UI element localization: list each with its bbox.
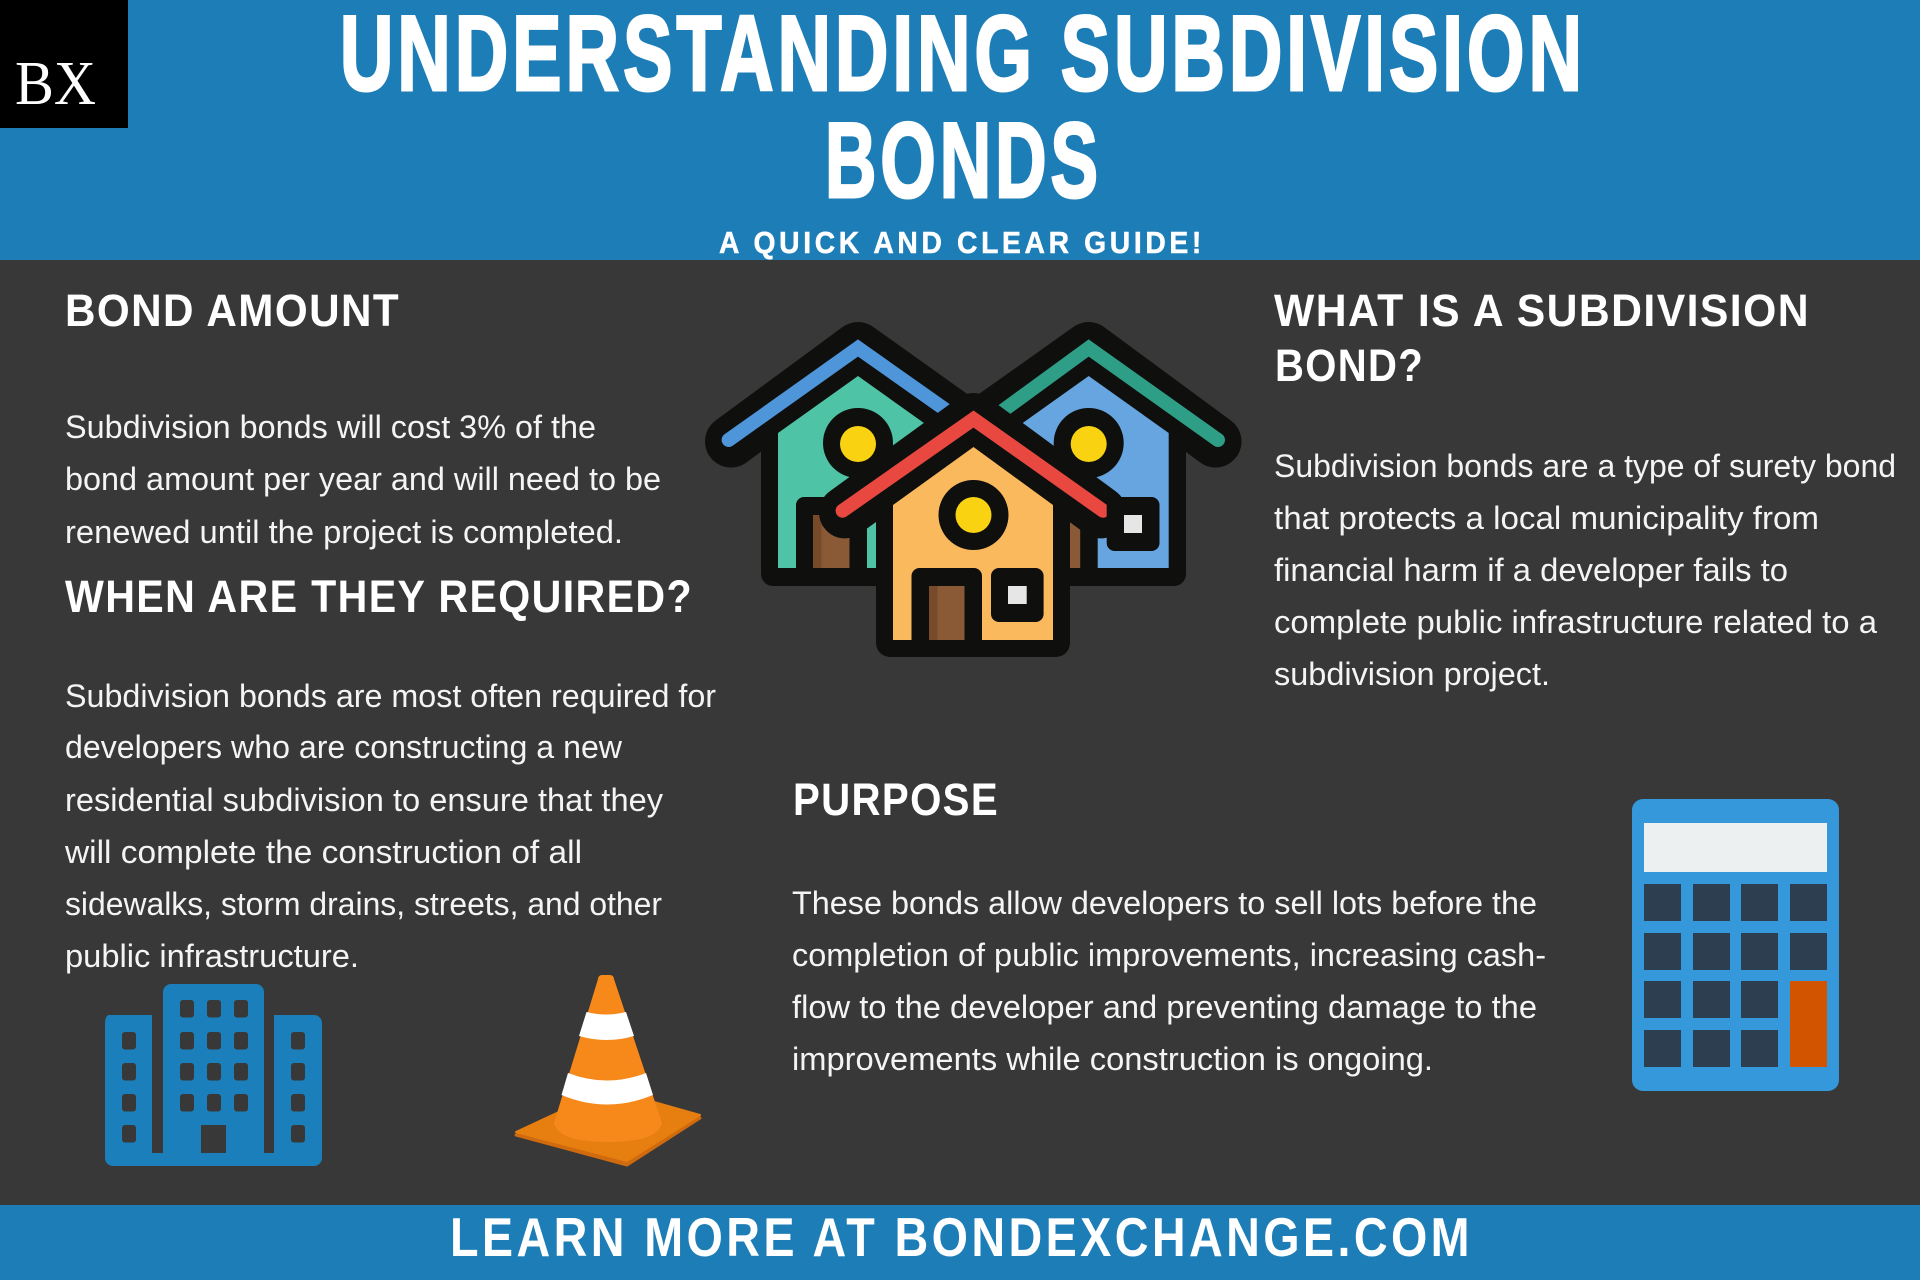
text: when required body: sidewalks, storm drains, streets, and other [65, 886, 662, 922]
text: purpose body: completion of public improvements, increasing cash- [792, 937, 1546, 973]
panel: purpose [792, 774, 1546, 1077]
heading: what is a subdivision bond: BOND? [1275, 340, 1424, 391]
text: when required body: residential subdivision to ensure that they [65, 782, 663, 818]
text: when required body: public infrastructure. [65, 938, 359, 974]
heading: purpose: PURPOSE [793, 774, 999, 825]
heading: what is a subdivision bond [1274, 285, 1810, 391]
heading: bond amount: BOND AMOUNT [65, 285, 400, 336]
logo: BX [0, 0, 128, 128]
footer band [0, 1205, 1920, 1280]
subtitle: A QUICK AND CLEAR GUIDE! [719, 225, 1205, 260]
heading: what is a subdivision bond: WHAT IS A SUBDIVISION [1274, 285, 1810, 336]
heading: when are they required: WHEN ARE THEY REQUIRED? [65, 571, 693, 622]
text: when required body [64, 678, 716, 974]
icon part: right house [959, 348, 1218, 586]
footer call to action: LEARN MORE AT BONDEXCHANGE.COM [450, 1206, 1473, 1268]
title [340, 0, 1586, 220]
text: definition body: Subdivision bonds are a type of surety bond [1274, 448, 1896, 484]
text: bond amount body: renewed until the project is completed. [65, 514, 623, 550]
icon part: centre house [843, 419, 1103, 657]
panel: bond amount [65, 285, 661, 550]
text: purpose body: These bonds allow developers to sell lots before the [792, 885, 1537, 921]
logo: BX: BX [15, 50, 96, 118]
text: definition body: financial harm if a developer fails to [1274, 552, 1788, 588]
panel: when are they required [64, 571, 716, 974]
text: bond amount body: Subdivision bonds will cost 3% of the [65, 409, 596, 445]
text: purpose body: flow to the developer and preventing damage to the [792, 989, 1537, 1025]
icon part: right house window [1107, 497, 1160, 551]
text: purpose body: improvements while construction is ongoing. [792, 1041, 1433, 1077]
text: purpose body [792, 885, 1546, 1077]
text: bond amount body [65, 409, 661, 550]
text: when required body: will complete the construction of all [64, 834, 582, 870]
text: definition body: subdivision project. [1274, 656, 1550, 692]
icon: traffic cone [516, 975, 700, 1165]
text: definition body: that protects a local municipality from [1274, 500, 1819, 536]
text: when required body: developers who are constructing a new [65, 729, 623, 765]
panel: what is a subdivision bond [1274, 285, 1896, 692]
text: bond amount body: bond amount per year and will need to be [65, 461, 661, 497]
icon: three houses [729, 348, 1218, 657]
text: definition body [1274, 448, 1896, 692]
header band [0, 0, 1920, 260]
text: definition body: complete public infrastructure related to a [1274, 604, 1877, 640]
icon: calculator [1632, 799, 1839, 1091]
title: BONDS [825, 100, 1102, 220]
icon part: left house [729, 348, 987, 586]
text: when required body: Subdivision bonds are most often required for [65, 678, 716, 714]
icon: office buildings [105, 984, 322, 1166]
